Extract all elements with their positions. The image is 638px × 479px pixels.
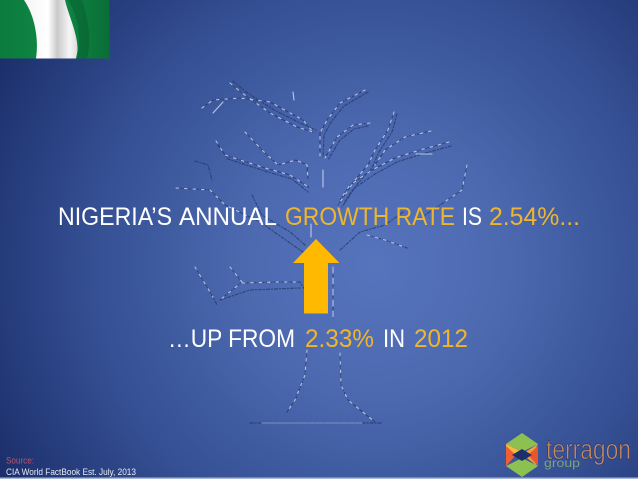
text line: up from 2.33% in 2012: 2.33% <box>305 325 374 353</box>
icon: Nigerian flag <box>0 0 110 58</box>
source note: CIA World FactBook Est. July, 2013 <box>6 467 136 477</box>
heading line: Nigeria's annual growth rate: 2.54%... <box>489 203 580 231</box>
heading line: Nigeria's annual growth rate: ANNUAL <box>179 203 277 231</box>
icon: up arrow <box>293 239 340 314</box>
bottom edge line <box>0 478 638 479</box>
text line: up from 2.33% in 2012: …UP FROM <box>168 325 295 353</box>
heading line: Nigeria's annual growth rate: IS <box>462 203 482 231</box>
text line: up from 2.33% in 2012: 2012 <box>414 325 468 353</box>
logo: terragon group <box>506 433 631 477</box>
tree outline illustration <box>176 81 467 423</box>
source note <box>6 456 136 477</box>
heading line: Nigeria's annual growth rate <box>58 203 580 231</box>
text line: up from 2.33% in 2012 <box>168 325 468 353</box>
source note: Source: <box>6 456 34 466</box>
heading line: Nigeria's annual growth rate: GROWTH RATE <box>285 203 455 231</box>
logo subtext: group <box>544 456 580 470</box>
text line: up from 2.33% in 2012: IN <box>383 325 405 353</box>
heading line: Nigeria's annual growth rate: NIGERIA’S <box>58 203 172 231</box>
icon: hexagon mark <box>506 433 538 477</box>
